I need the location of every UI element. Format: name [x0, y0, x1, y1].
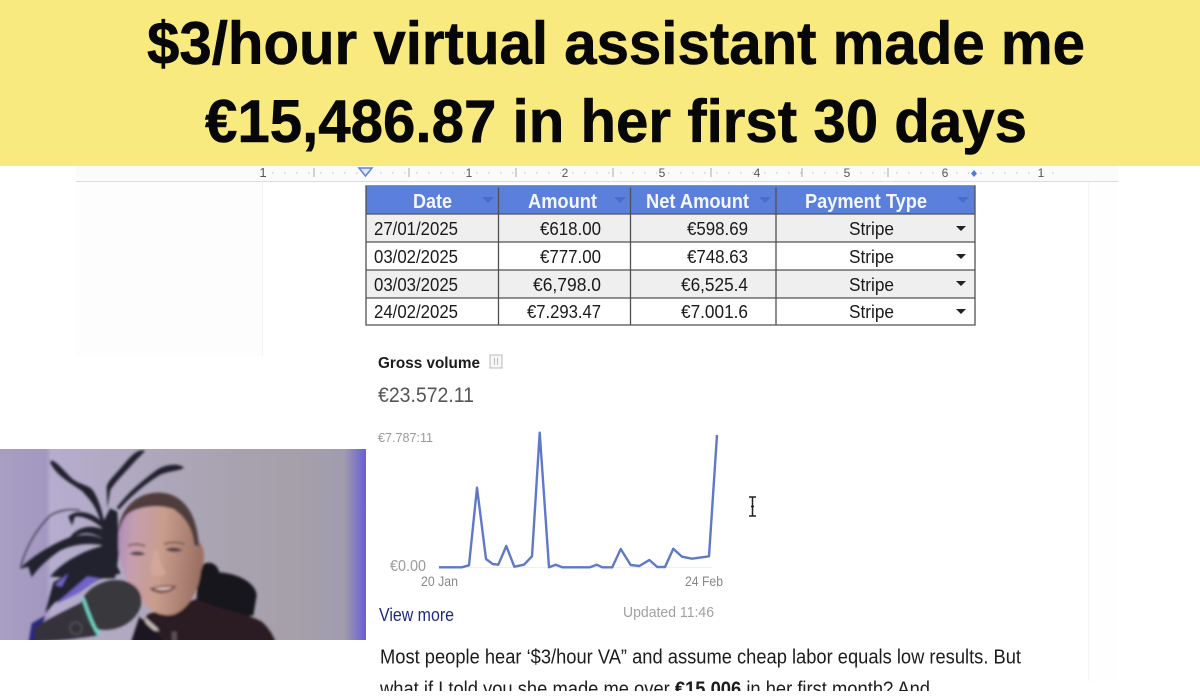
- plant blue highlights: [55, 573, 100, 604]
- x axis start label: 20 Jan: [421, 574, 458, 589]
- webcam video panel: [0, 449, 366, 645]
- ruler: 2: [562, 166, 569, 180]
- table rows: Stripe: [849, 219, 894, 239]
- title line 1: $3/hour virtual assistant made me: [147, 10, 1085, 77]
- chair: [197, 563, 257, 618]
- table rows: Stripe: [849, 302, 894, 322]
- gross volume heading: Gross volume: [378, 355, 480, 372]
- body paragraph: Most people hear ‘$3/hour VA” and assume cheap labor equals low results. But: [380, 646, 1021, 668]
- icon: info: [490, 355, 502, 368]
- eyes: [129, 547, 183, 556]
- table rows: Stripe: [849, 247, 894, 267]
- table rows: €6,798.0: [533, 275, 601, 295]
- plant thin outline leaf: [21, 510, 80, 567]
- table rows: €777.00: [540, 247, 601, 267]
- updated timestamp: Updated 11:46: [623, 605, 714, 621]
- table header: Date: [413, 191, 452, 213]
- title banner: [0, 0, 1200, 166]
- table rows: €748.63: [687, 247, 748, 267]
- table header: [413, 191, 969, 213]
- table rows: 03/02/2025: [374, 247, 458, 267]
- ruler: 1: [466, 166, 473, 180]
- ruler: 4: [754, 166, 761, 180]
- payments table: [366, 186, 975, 325]
- table rows: 24/02/2025: [374, 302, 458, 322]
- mouth: [149, 585, 177, 593]
- table rows: Stripe: [849, 275, 894, 295]
- ruler: 5: [844, 166, 851, 180]
- y axis max label: €7.787:11: [378, 430, 433, 445]
- x axis end label: 24 Feb: [685, 574, 723, 589]
- chart line: [439, 433, 717, 567]
- head: [118, 497, 204, 615]
- table rows: €7.293.47: [527, 302, 601, 322]
- body paragraph: [380, 648, 1021, 691]
- table header: Net Amount: [646, 191, 749, 213]
- shirt collar: [143, 616, 159, 631]
- torso: [142, 598, 277, 640]
- ruler: 5: [659, 166, 666, 180]
- table rows: €7.001.6: [681, 302, 748, 322]
- y axis min label: €0.00: [390, 558, 426, 575]
- table rows: €598.69: [687, 219, 748, 239]
- hair: [119, 493, 199, 547]
- icon: text cursor: [749, 497, 756, 516]
- table rows: [374, 219, 966, 322]
- gross volume total: €23.572.11: [378, 384, 474, 407]
- table rows: 03/03/2025: [374, 275, 458, 295]
- plant: [19, 450, 184, 613]
- table rows: €6,525.4: [681, 275, 748, 295]
- table rows: 27/01/2025: [374, 219, 458, 239]
- view more link: View more: [379, 605, 454, 625]
- document side margins: [76, 181, 1118, 681]
- ruler: 6: [942, 166, 949, 180]
- table header: Amount: [528, 191, 597, 213]
- nose shading: [152, 552, 165, 576]
- ruler: 1: [259, 165, 267, 180]
- ruler: [76, 165, 1118, 182]
- title line 2: €15,486.87 in her first 30 days: [205, 88, 1027, 155]
- table header: Payment Type: [805, 191, 927, 213]
- table rows: €618.00: [540, 219, 601, 239]
- ruler: 1: [1038, 166, 1045, 180]
- microphone: [28, 616, 45, 643]
- line chart: [378, 430, 723, 589]
